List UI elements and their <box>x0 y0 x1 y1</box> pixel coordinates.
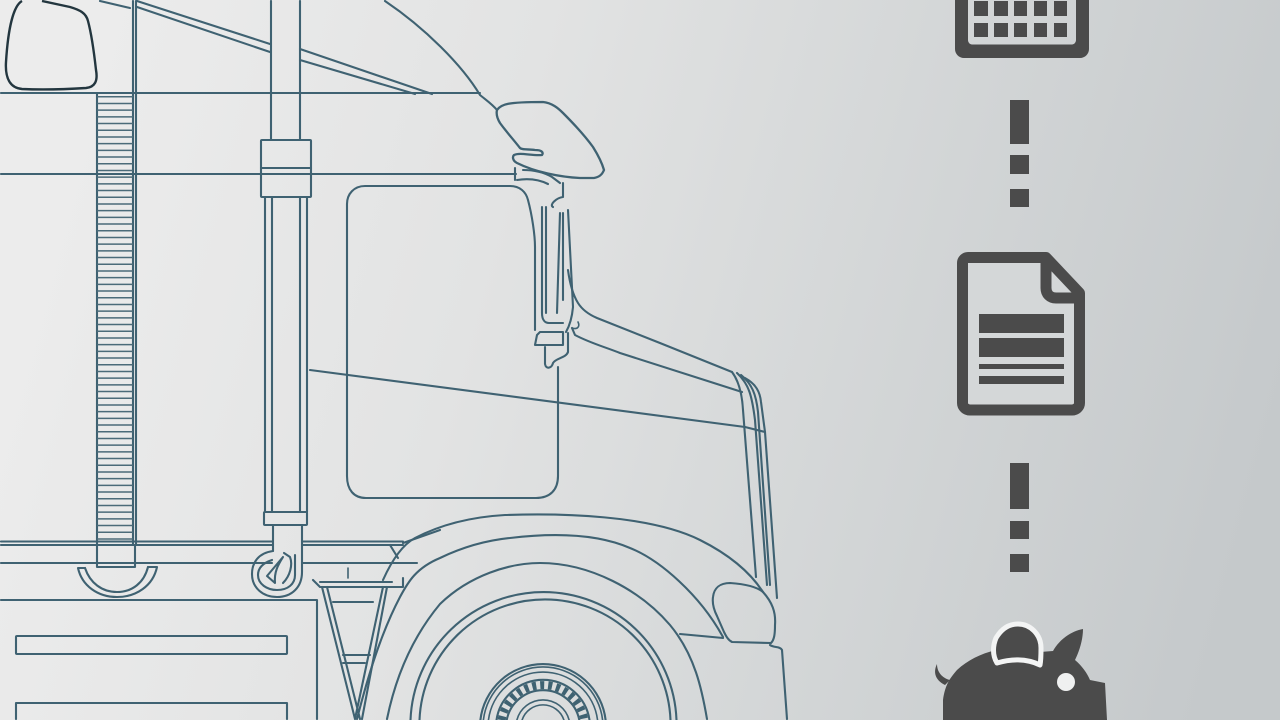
cab horizontal body lines <box>1 1 516 174</box>
connector: dash dots upper <box>1010 100 1029 207</box>
large side mirror <box>497 102 604 178</box>
ribbed exhaust column <box>97 1 136 545</box>
tyre <box>410 592 676 720</box>
process icon column <box>935 0 1107 720</box>
connector: dash dots lower <box>1010 463 1029 572</box>
hood top lines <box>568 270 742 392</box>
truck line drawing <box>1 1 787 720</box>
front bumper <box>770 645 787 719</box>
icon: calendar <box>955 0 1089 58</box>
intake hook fitting <box>252 545 302 597</box>
wheel hub <box>480 664 606 720</box>
front grille strips <box>732 372 777 598</box>
access steps <box>313 568 403 719</box>
lower left pipe and half-round bracket <box>78 545 157 597</box>
belt line across door and hood <box>310 370 765 432</box>
fender arcs <box>357 514 763 719</box>
icon: piggy bank with coin <box>935 624 1107 720</box>
cab windshield corner mirror <box>6 1 97 89</box>
door outline <box>347 186 558 498</box>
mirror arm and bracket <box>515 168 579 368</box>
icon: document <box>962 258 1080 410</box>
side box vents <box>16 636 287 719</box>
headlight <box>713 583 775 643</box>
vertical air intake pipe with collars <box>261 1 311 551</box>
chassis rails and side box <box>1 542 417 719</box>
